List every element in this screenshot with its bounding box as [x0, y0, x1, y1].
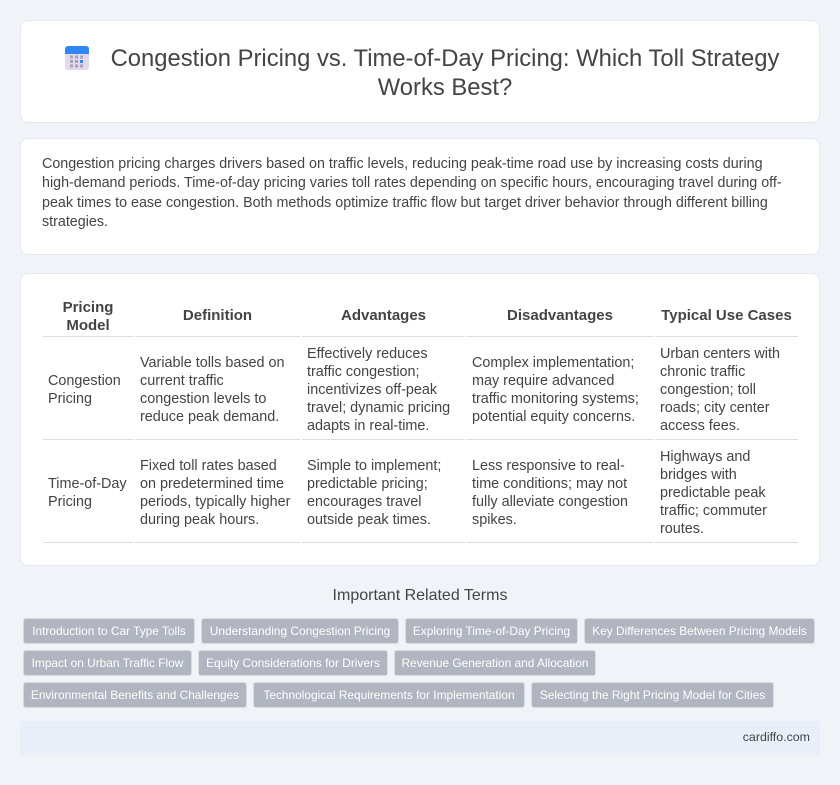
- related term tags: [23, 618, 815, 708]
- footer source: cardiffo.com: [743, 730, 810, 744]
- related term tags: Environmental Benefits and Challenges: [31, 688, 239, 702]
- related term tags: Equity Considerations for Drivers: [206, 656, 380, 670]
- table row: congestion pricing: roads; city center: [660, 400, 770, 416]
- table row: time-of-day pricing: outside peak times.: [307, 512, 431, 528]
- related term tags: Understanding Congestion Pricing: [210, 624, 390, 638]
- related term tags: Impact on Urban Traffic Flow: [32, 656, 183, 670]
- table row: time-of-day pricing: Fixed toll rates based: [140, 458, 277, 474]
- table header: Typical Use Cases: [661, 307, 792, 324]
- table row: congestion pricing: traffic congestion;: [307, 364, 420, 380]
- table row: congestion pricing: [48, 346, 780, 434]
- heading: related terms: Important Related Terms: [333, 587, 507, 604]
- table row: time-of-day pricing: Time-of-Day: [48, 476, 127, 492]
- table row: congestion pricing: current traffic: [140, 373, 224, 389]
- table row: time-of-day pricing: on predetermined time: [140, 476, 284, 492]
- title: Works Best?: [378, 74, 512, 101]
- title: [111, 45, 780, 101]
- table header: Model: [66, 317, 110, 334]
- title: Congestion Pricing vs. Time-of-Day Pricing: Which Toll Strategy: [111, 45, 779, 72]
- summary text: Congestion pricing charges drivers based on traffic levels, reducing peak-time road use by increasing costs during: [42, 156, 763, 172]
- table row: time-of-day pricing: Highways and: [660, 449, 750, 465]
- table header: Disadvantages: [507, 307, 613, 324]
- related term tags: Exploring Time-of-Day Pricing: [413, 624, 570, 638]
- related term tags: Key Differences Between Pricing Models: [592, 624, 807, 638]
- table row: time-of-day pricing: traffic; commuter: [660, 503, 767, 519]
- table row: time-of-day pricing: fully alleviate congestion: [472, 494, 628, 510]
- table row: congestion pricing: travel; dynamic pricing: [307, 400, 450, 416]
- table header: Pricing: [63, 299, 113, 316]
- panel: summary: [20, 138, 820, 255]
- icon: calendar: [65, 46, 89, 70]
- table row: time-of-day pricing: Pricing: [48, 494, 92, 510]
- footer: [20, 721, 820, 755]
- table row: congestion pricing: Complex implementation;: [472, 355, 634, 371]
- table row: congestion pricing: reduce peak demand.: [140, 409, 279, 425]
- table row: congestion pricing: Congestion: [48, 373, 121, 389]
- table row: time-of-day pricing: during peak hours.: [140, 512, 259, 528]
- table row: time-of-day pricing: Less responsive to real-: [472, 458, 625, 474]
- table row: time-of-day pricing: spikes.: [472, 512, 517, 528]
- table row: time-of-day pricing: Simple to implement;: [307, 458, 441, 474]
- table header: [63, 299, 792, 334]
- table row: congestion pricing: Variable tolls based on: [140, 355, 285, 371]
- panel: comparison table: [20, 273, 820, 566]
- summary text: high-demand periods. Time-of-day pricing varies toll rates depending on specific hours, encouraging travel during off-: [42, 175, 782, 191]
- table header: Advantages: [341, 307, 426, 324]
- table row: time-of-day pricing: time conditions; may not: [472, 476, 627, 492]
- table row: congestion pricing: incentivizes off-peak: [307, 382, 437, 398]
- table row: time-of-day pricing: [48, 449, 767, 537]
- table row: time-of-day pricing: encourages travel: [307, 494, 421, 510]
- table row: congestion pricing: congestion levels to: [140, 391, 266, 407]
- related term tags: Technological Requirements for Implementation: [263, 688, 515, 702]
- table row: congestion pricing: may require advanced: [472, 373, 614, 389]
- summary text: strategies.: [42, 214, 108, 230]
- related term tags: Introduction to Car Type Tolls: [32, 624, 186, 638]
- table row: time-of-day pricing: predictable peak: [660, 485, 766, 501]
- table row: time-of-day pricing: bridges with: [660, 467, 737, 483]
- related term tags: Revenue Generation and Allocation: [401, 656, 589, 670]
- table row: congestion pricing: adapts in real-time.: [307, 418, 429, 434]
- table row: congestion pricing: access fees.: [660, 418, 740, 434]
- table row: congestion pricing: congestion; toll: [660, 382, 756, 398]
- summary text: [42, 156, 782, 230]
- table row: congestion pricing: potential equity concerns.: [472, 409, 635, 425]
- table row: congestion pricing: chronic traffic: [660, 364, 745, 380]
- table row: congestion pricing: Urban centers with: [660, 346, 780, 362]
- table row: time-of-day pricing: routes.: [660, 521, 704, 537]
- related term tags: Selecting the Right Pricing Model for Cities: [540, 688, 765, 702]
- panel: title card: [20, 20, 820, 123]
- table header: Definition: [183, 307, 252, 324]
- table row: time-of-day pricing: predictable pricing;: [307, 476, 428, 492]
- summary text: peak times to ease congestion. Both methods optimize traffic flow but target driver behavior through different billing: [42, 195, 768, 211]
- table row: congestion pricing: traffic monitoring systems;: [472, 391, 639, 407]
- table row: congestion pricing: Pricing: [48, 391, 92, 407]
- table row: time-of-day pricing: periods, typically higher: [140, 494, 290, 510]
- table row: congestion pricing: Effectively reduces: [307, 346, 428, 362]
